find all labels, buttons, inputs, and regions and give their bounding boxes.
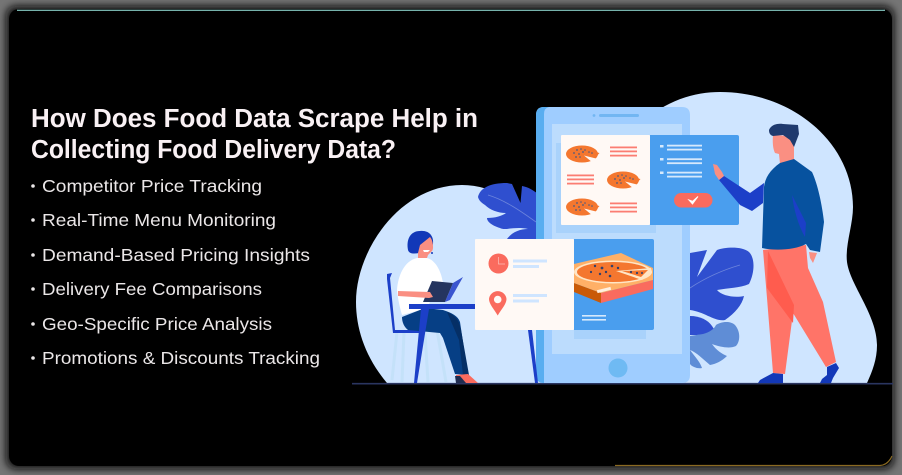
bullet list: Demand-Based Pricing Insights: [42, 245, 310, 265]
panel: delivery time and location: [475, 239, 574, 330]
icon: map pin: [489, 291, 506, 316]
icon: pale leaf: [690, 322, 739, 368]
phone home button: [608, 358, 628, 378]
title: Collecting Food Delivery Data?: [31, 136, 396, 164]
ground line: [352, 383, 893, 385]
panel: menu list: [561, 135, 650, 225]
hand: [713, 164, 724, 180]
man presenting: [713, 124, 839, 383]
chair: [387, 273, 446, 382]
lower hand: [809, 252, 817, 263]
trousers: [763, 245, 836, 374]
pizza box sides: [574, 283, 601, 303]
shoes: [758, 363, 839, 383]
panel: order details: [650, 135, 739, 225]
info lines: [513, 260, 547, 302]
panel: pizza box: [574, 239, 654, 330]
woman at table: [387, 231, 538, 383]
pizza thumbnails: [566, 146, 640, 216]
shirt: [397, 258, 443, 315]
icon: clock: [488, 254, 508, 274]
arm: [398, 291, 433, 298]
hair: [769, 124, 799, 147]
neck and face: [773, 135, 794, 164]
button with check: [674, 193, 712, 208]
menu text lines: [567, 146, 637, 212]
title: How Does Food Data Scrape Help in: [31, 105, 478, 133]
pizza box lid: [574, 253, 653, 293]
illustration background blob: [356, 92, 877, 383]
table: [409, 304, 538, 383]
icon: left leaf: [478, 183, 538, 239]
caption lines: [582, 315, 606, 321]
icon: right leaf: [690, 248, 754, 335]
hair: [408, 231, 433, 254]
bullet list: Real-Time Menu Monitoring: [42, 210, 276, 230]
sweater: [762, 159, 824, 252]
open book: [423, 277, 463, 302]
bullet list: Geo-Specific Price Analysis: [42, 314, 272, 334]
bullet list: Competitor Price Tracking: [42, 176, 262, 196]
trousers: [402, 308, 468, 375]
pointing arm: [719, 176, 764, 211]
bullet list: [31, 176, 320, 368]
phone: [536, 107, 690, 383]
bullet list: Delivery Fee Comparisons: [42, 279, 262, 299]
bullet list: Promotions & Discounts Tracking: [42, 348, 320, 368]
pizza: [574, 260, 652, 284]
title: [31, 105, 478, 164]
face: [418, 237, 433, 258]
shoes: [456, 374, 478, 383]
